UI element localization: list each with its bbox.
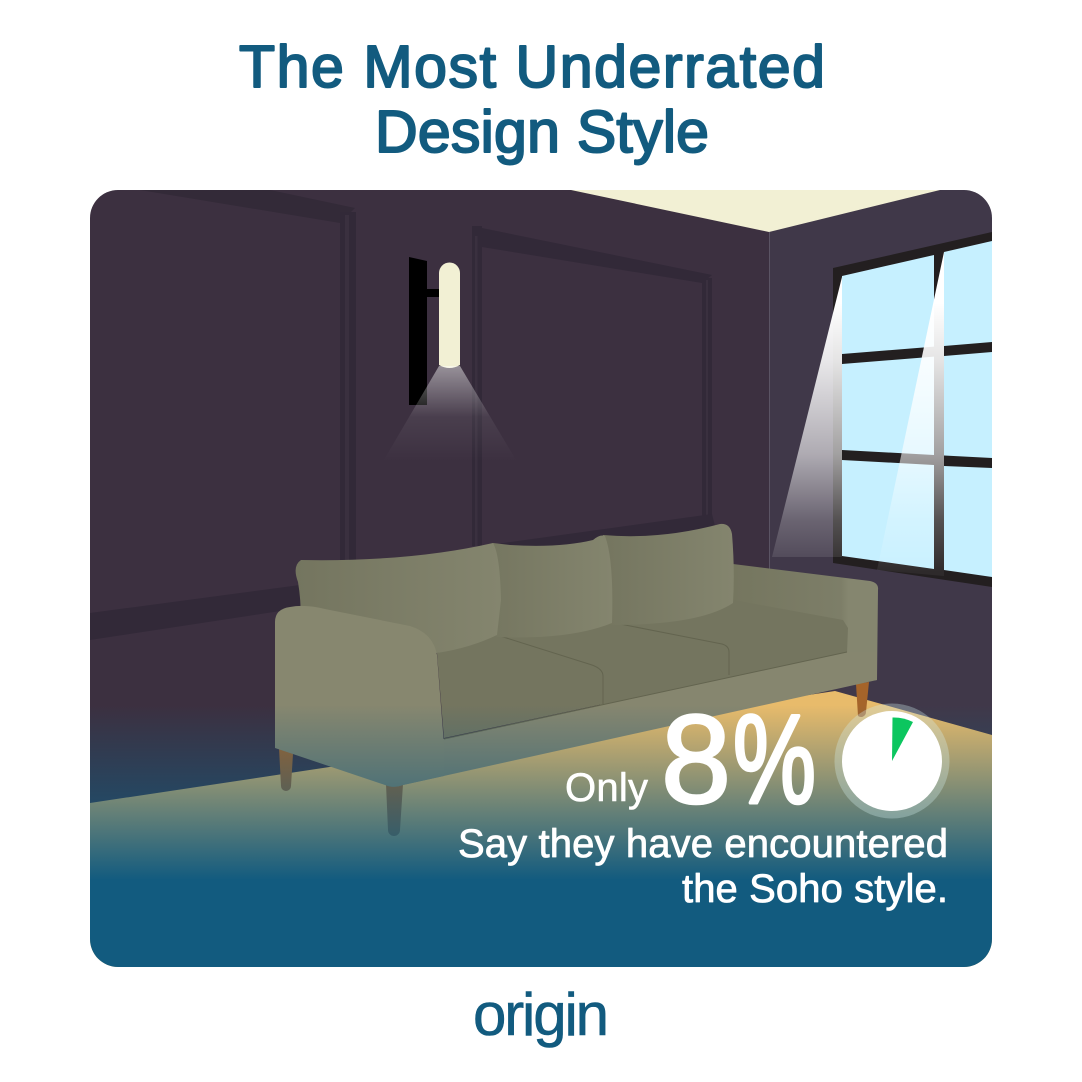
- window: [772, 232, 992, 587]
- caption: the Soho style.: [682, 867, 948, 911]
- wall moulding: centre panel: [472, 226, 716, 560]
- label: only: Only: [565, 766, 648, 810]
- big number: 8: 8: [661, 689, 731, 830]
- light beam left: [772, 277, 842, 557]
- sofa front base: [389, 654, 876, 787]
- lamp bracket: [409, 257, 427, 405]
- back cushion left: [296, 543, 501, 653]
- title: Design Style: [375, 99, 709, 165]
- sofa rear body and right arm: [600, 564, 878, 705]
- caption: Say they have encountered: [458, 822, 948, 866]
- caption: [458, 822, 948, 911]
- wall corner line: [769, 232, 770, 568]
- wall lamp: [398, 257, 501, 436]
- window glass: [842, 255, 934, 354]
- wall moulding: left panel: [90, 190, 356, 640]
- title: [239, 34, 825, 165]
- panel: living room scene: [85, 190, 997, 972]
- fade overlay: [85, 700, 997, 972]
- back cushion right: [600, 524, 734, 625]
- lamp glow: [398, 366, 501, 436]
- logo: origin: [473, 981, 609, 1048]
- title: The Most Underrated: [239, 34, 825, 100]
- sofa left arm: [275, 606, 444, 787]
- lamp tube: [439, 262, 460, 368]
- ceiling: [571, 190, 940, 232]
- window frame: [833, 232, 992, 587]
- floor: [90, 691, 992, 967]
- left wall: [90, 190, 770, 810]
- right wall: [769, 190, 992, 750]
- seat front edge line: [444, 652, 847, 739]
- sofa legs: [279, 682, 869, 836]
- light beam right: [877, 252, 944, 576]
- stat callout: [458, 689, 948, 911]
- pie chart: 8 percent: [834, 704, 950, 818]
- sofa: [275, 524, 878, 836]
- seat cushions: [437, 618, 848, 738]
- big number: percent sign: %: [733, 690, 816, 830]
- back cushion middle: [480, 536, 612, 637]
